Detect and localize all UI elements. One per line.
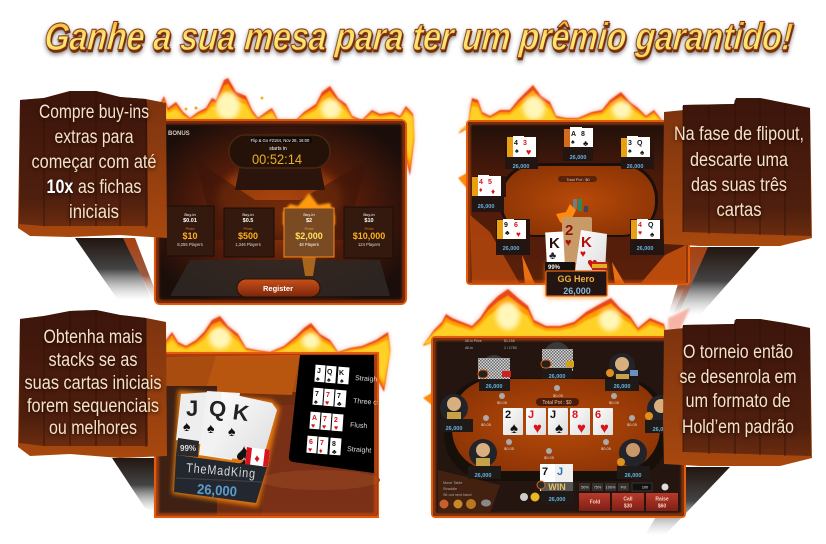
hand ranking chart: 7 <box>337 393 341 400</box>
seat: bottom left: 26,000 <box>503 246 519 252</box>
hand ranking chart: ♣ <box>337 401 342 408</box>
stats header: All-in Prize <box>465 339 482 343</box>
stats header: 1 / 1760 <box>504 346 517 350</box>
seat: bottom right: 26,000 <box>637 246 653 252</box>
sign text: Hold’em padrão <box>682 417 794 438</box>
seat: top centre: 26,000 <box>570 155 586 161</box>
tier: $2,000 selected: Buy-in <box>303 212 315 217</box>
hero hand: TheMadKing: J <box>186 396 198 421</box>
hero hand: GG Hero: 26,000 <box>563 286 591 296</box>
seat: top right: Q <box>637 140 643 147</box>
hand ranking chart <box>289 355 378 473</box>
tier: $2,000 selected <box>283 193 335 276</box>
community cards: J <box>550 409 556 421</box>
tier: $500: $0.5 <box>243 218 253 224</box>
hero hand: GG Hero: ♥ <box>587 254 598 274</box>
tier: $10,000: $10,000 <box>353 231 385 241</box>
panel: hold'em table <box>423 289 812 535</box>
seat: left: ♦ <box>479 187 483 194</box>
blinds: $0.05 <box>481 422 492 427</box>
seat: left: 26,000 <box>478 204 494 210</box>
tier: $10,000: $10 <box>364 218 374 224</box>
community cards: 8 <box>572 409 578 421</box>
flames: buy-ins panel <box>160 78 414 176</box>
tier: $10,000: Buy-in <box>363 212 375 217</box>
sign text: ou melhores <box>49 418 137 439</box>
countdown timer: 00:52:14 <box>252 151 302 167</box>
hand ranking chart: 2 <box>334 417 338 424</box>
sign text: extras para <box>54 127 134 148</box>
seat: right <box>645 395 681 433</box>
hero hand: TheMadKing: 99% <box>180 444 196 453</box>
hero seat with win badge: 7 <box>542 466 548 478</box>
seat: top centre: 8 <box>581 131 585 138</box>
tier: $500 <box>224 208 274 257</box>
hand ranking chart: 8 <box>332 441 336 448</box>
flames: hold'em panel <box>423 289 690 406</box>
table options: Straddle <box>443 487 457 491</box>
register button: Register <box>263 284 293 293</box>
hero hand: GG Hero: K <box>549 235 560 252</box>
tier: $10,000: 124 Players <box>358 242 380 247</box>
hero hand: TheMadKing <box>172 390 280 507</box>
hero hand: GG Hero: ♣ <box>549 250 556 262</box>
hero hand: GG Hero: 99% <box>548 265 561 271</box>
bet size buttons: 50% <box>581 486 589 490</box>
bet size buttons: 75% <box>594 486 602 490</box>
seat: top right: ♠ <box>640 148 645 157</box>
seat: bottom right <box>630 219 664 255</box>
sign text <box>680 342 796 438</box>
sign text: stacks se as <box>48 350 138 371</box>
hero seat with win badge <box>537 464 575 504</box>
sign text: começar com até <box>32 152 156 173</box>
seat: bottom right: ♠ <box>650 230 655 239</box>
tier: $10,000 <box>344 207 393 258</box>
panel: flipout <box>458 85 812 315</box>
tier: $2,000 selected: 48 Players <box>299 242 319 247</box>
table options: Sit out next hand <box>443 493 472 497</box>
seat: top centre <box>563 127 595 161</box>
seat: bottom right: Q <box>648 222 654 229</box>
hand ranking chart: ♥ <box>311 423 315 430</box>
tier: $10: Buy-in <box>184 212 196 217</box>
bet size buttons: 100 <box>642 486 648 490</box>
screen: hold'em table <box>432 337 685 517</box>
sign: starting hands <box>18 310 167 458</box>
hero hand: TheMadKing: Q <box>208 395 228 422</box>
community cards: ♠ <box>510 420 518 437</box>
blinds: $0.05 <box>553 393 564 398</box>
seat: left <box>472 175 506 212</box>
hand ranking chart: ♠ <box>316 376 320 383</box>
poker table <box>499 163 658 237</box>
sign text: iniciais <box>69 202 119 223</box>
seat: bottom left: 6 <box>514 222 518 229</box>
seat: top centre: ♣ <box>583 139 589 148</box>
seat: top right: 26,000 <box>614 384 630 390</box>
tier: $500: Buy-in <box>242 212 254 217</box>
sign text <box>32 102 156 223</box>
stats header: $1,156 <box>504 339 515 343</box>
sign text: se desenrola em <box>680 367 796 388</box>
seat: left: 26,000 <box>446 426 462 432</box>
blinds <box>481 385 638 460</box>
seat: top right: ♠ <box>628 148 632 155</box>
table options <box>443 481 472 497</box>
tier: $10,000: Prize <box>364 226 374 231</box>
hand ranking chart: ♥ <box>325 400 329 407</box>
sign text: O torneio então <box>683 342 793 363</box>
raise button <box>646 493 678 511</box>
stats header <box>465 339 517 350</box>
hand ranking chart: 7 <box>326 392 330 399</box>
seat: top left <box>478 355 511 391</box>
seat: top left: 26,000 <box>513 164 529 170</box>
hand ranking chart: 7 <box>323 416 327 423</box>
seat: top left: ♥ <box>526 147 531 157</box>
sign text <box>24 327 162 439</box>
community cards: 2 <box>505 409 511 421</box>
hand ranking chart: ♠ <box>340 378 344 385</box>
tier: $500: 1,346 Players <box>235 242 261 247</box>
tier: $10: 8,255 Players <box>177 242 203 247</box>
poker table: Total Pot : $0 <box>566 177 590 182</box>
community cards <box>503 408 613 437</box>
tier: $10 <box>166 206 214 256</box>
hand ranking chart: K <box>339 370 344 377</box>
seat: right: 26,000 <box>653 427 669 433</box>
sign: flipout <box>663 98 812 246</box>
post: flipout sign <box>668 247 760 315</box>
hand ranking chart: ♥ <box>308 447 312 454</box>
seat: top right <box>620 136 654 170</box>
hero hand: TheMadKing: ♠ <box>228 423 236 439</box>
seat: left: ♦ <box>491 187 495 196</box>
seat: top centre: A <box>571 131 576 138</box>
countdown timer: Flip & Go #2184, Nov 28, 16:00 <box>251 138 310 143</box>
seat: bottom left: 26,000 <box>475 473 491 479</box>
flames: starting hands panel <box>165 316 390 392</box>
hero hand: TheMadKing: ♦ <box>254 453 260 465</box>
seat: left <box>440 394 473 432</box>
hand ranking chart: Flush <box>350 422 368 430</box>
seat: top centre: ♠ <box>571 139 575 146</box>
seat: top left: 3 <box>523 140 527 147</box>
sign text: um formato de <box>686 391 790 412</box>
stats header: All-in <box>465 346 473 350</box>
countdown timer: starts in <box>269 146 287 152</box>
community cards: 6 <box>595 409 601 421</box>
seat: top right <box>605 353 639 391</box>
fold button <box>579 493 610 511</box>
blinds: $0.05 <box>609 400 620 405</box>
hand ranking chart: 7 <box>320 440 324 447</box>
screen: buy-in selection <box>155 120 406 304</box>
seat: bottom right: 4 <box>638 222 642 229</box>
raise button: Raise <box>655 496 669 502</box>
screen: flipout table <box>467 121 689 284</box>
hand ranking chart: Straigh <box>355 375 378 384</box>
blinds: $0.05 <box>497 400 508 405</box>
seat: bottom right: ♥ <box>638 230 642 237</box>
tier: $10: $10 <box>182 231 198 241</box>
sign text: forem sequenciais <box>27 396 159 417</box>
tier: $500: Prize <box>243 226 253 231</box>
hero hand: TheMadKing: ♠ <box>236 438 252 471</box>
call button: Call <box>623 496 633 502</box>
seat: bottom left: ♥ <box>516 230 521 239</box>
hero hand: GG Hero <box>545 204 607 298</box>
hero seat with win badge: 26,000 <box>549 497 565 503</box>
post: hold'em sign <box>645 467 730 535</box>
bet size buttons: Pot <box>621 486 627 490</box>
community cards: ♥ <box>577 420 586 437</box>
sign text: suas cartas iniciais <box>24 373 162 394</box>
bet size buttons: 100% <box>606 486 616 490</box>
sign text: cartas <box>716 200 762 221</box>
tier: $10: $0.01 <box>183 218 197 224</box>
hand ranking chart: Straight <box>347 446 371 455</box>
sign: hold'em <box>663 319 812 466</box>
poker table: Total Pot : $0 <box>542 400 572 406</box>
panel: buy-ins <box>18 78 414 304</box>
tier: $2,000 selected: Prize <box>304 226 314 231</box>
hero hand: GG Hero: GG Hero <box>557 274 595 284</box>
hero hand: GG Hero: K <box>581 234 592 251</box>
tier: $2,000 selected: $2 <box>306 218 312 224</box>
hero hand: TheMadKing: 26,000 <box>196 481 238 499</box>
sign: buy-ins <box>18 91 167 238</box>
hand ranking chart: ♣ <box>332 449 337 456</box>
hero hand: TheMadKing: TheMadKing <box>186 460 257 481</box>
community cards: J <box>528 409 534 421</box>
blinds: $0.05 <box>601 446 612 451</box>
tier: $500: $500 <box>238 231 258 241</box>
sign text: descarte uma <box>690 150 788 171</box>
hero hand: TheMadKing: ♠ <box>207 420 215 436</box>
seat: left: 5 <box>488 179 492 186</box>
community cards: ♠ <box>555 420 563 437</box>
seat: top left: 4 <box>514 140 518 147</box>
seat: top centre <box>541 342 574 380</box>
sign text: 10x as fichas <box>46 177 142 198</box>
blinds: $0.05 <box>504 446 515 451</box>
register button <box>237 279 320 297</box>
sign text: Obtenha mais <box>44 327 142 348</box>
raise button: $60 <box>658 504 666 510</box>
hand ranking chart: Q <box>327 369 333 376</box>
poker table <box>444 378 668 481</box>
hand ranking chart: A <box>312 415 317 422</box>
hand ranking chart: ♦ <box>319 448 323 455</box>
hand ranking chart: Three c <box>353 398 378 407</box>
seat: top left: 26,000 <box>486 384 502 390</box>
blinds: $0.05 <box>544 455 555 460</box>
hand ranking chart: 6 <box>309 439 313 446</box>
seat: left: 4 <box>479 179 483 186</box>
panel: starting hands <box>18 310 390 517</box>
sign text: das suas três <box>691 175 787 196</box>
seat: bottom left <box>496 219 530 255</box>
sign text: Compre buy-ins <box>39 102 149 123</box>
seat: top left: ♠ <box>515 148 519 155</box>
hero hand: TheMadKing: K <box>231 399 251 426</box>
seat: bottom left: 9 <box>504 222 508 229</box>
tier: $10: Prize <box>185 226 195 231</box>
seat: bottom left <box>468 439 501 479</box>
post: starting hands sign <box>112 458 156 512</box>
hero seat with win badge: J <box>557 466 563 478</box>
hero hand: GG Hero: ♥ <box>565 237 572 249</box>
community cards: ♥ <box>533 420 542 437</box>
hand ranking chart: ♠ <box>327 377 331 384</box>
seat: bottom right <box>617 439 650 479</box>
hand ranking chart: ♥ <box>334 425 338 432</box>
post: buy-ins sign <box>75 238 155 300</box>
bet size buttons <box>579 483 668 491</box>
community cards: ♥ <box>600 420 609 437</box>
call button <box>612 493 644 511</box>
logo fragment: BONUS <box>168 131 190 137</box>
countdown timer <box>229 135 330 190</box>
sign text <box>674 124 804 221</box>
sign text: Na fase de flipout, <box>674 124 804 145</box>
call button: $30 <box>624 504 632 510</box>
tier: $2,000 selected: $2,000 <box>295 231 323 241</box>
fold button: Fold <box>590 500 600 506</box>
hand ranking chart: ♥ <box>322 424 326 431</box>
seat: top centre: 26,000 <box>549 374 565 380</box>
seat: top left <box>505 136 539 170</box>
seat: top right: 3 <box>628 140 632 147</box>
hand ranking chart: 7 <box>315 391 319 398</box>
screen: card ranking close-up <box>155 353 380 517</box>
hand ranking chart: ♠ <box>314 399 318 406</box>
table options: Move Table <box>443 481 462 485</box>
hero hand: TheMadKing: ♠ <box>183 418 191 434</box>
hand ranking chart: J <box>317 368 321 375</box>
seat: bottom left: ♣ <box>505 230 510 237</box>
hero seat with win badge: WIN <box>548 482 566 492</box>
blinds: $0.05 <box>627 422 638 427</box>
hero hand: GG Hero: ♥ <box>580 249 586 260</box>
flames: flipout panel <box>458 85 666 190</box>
hero hand: GG Hero: 2 <box>565 222 573 239</box>
emote icons <box>440 492 540 509</box>
seat: bottom right: 26,000 <box>625 473 641 479</box>
seat: top right: 26,000 <box>627 164 643 170</box>
